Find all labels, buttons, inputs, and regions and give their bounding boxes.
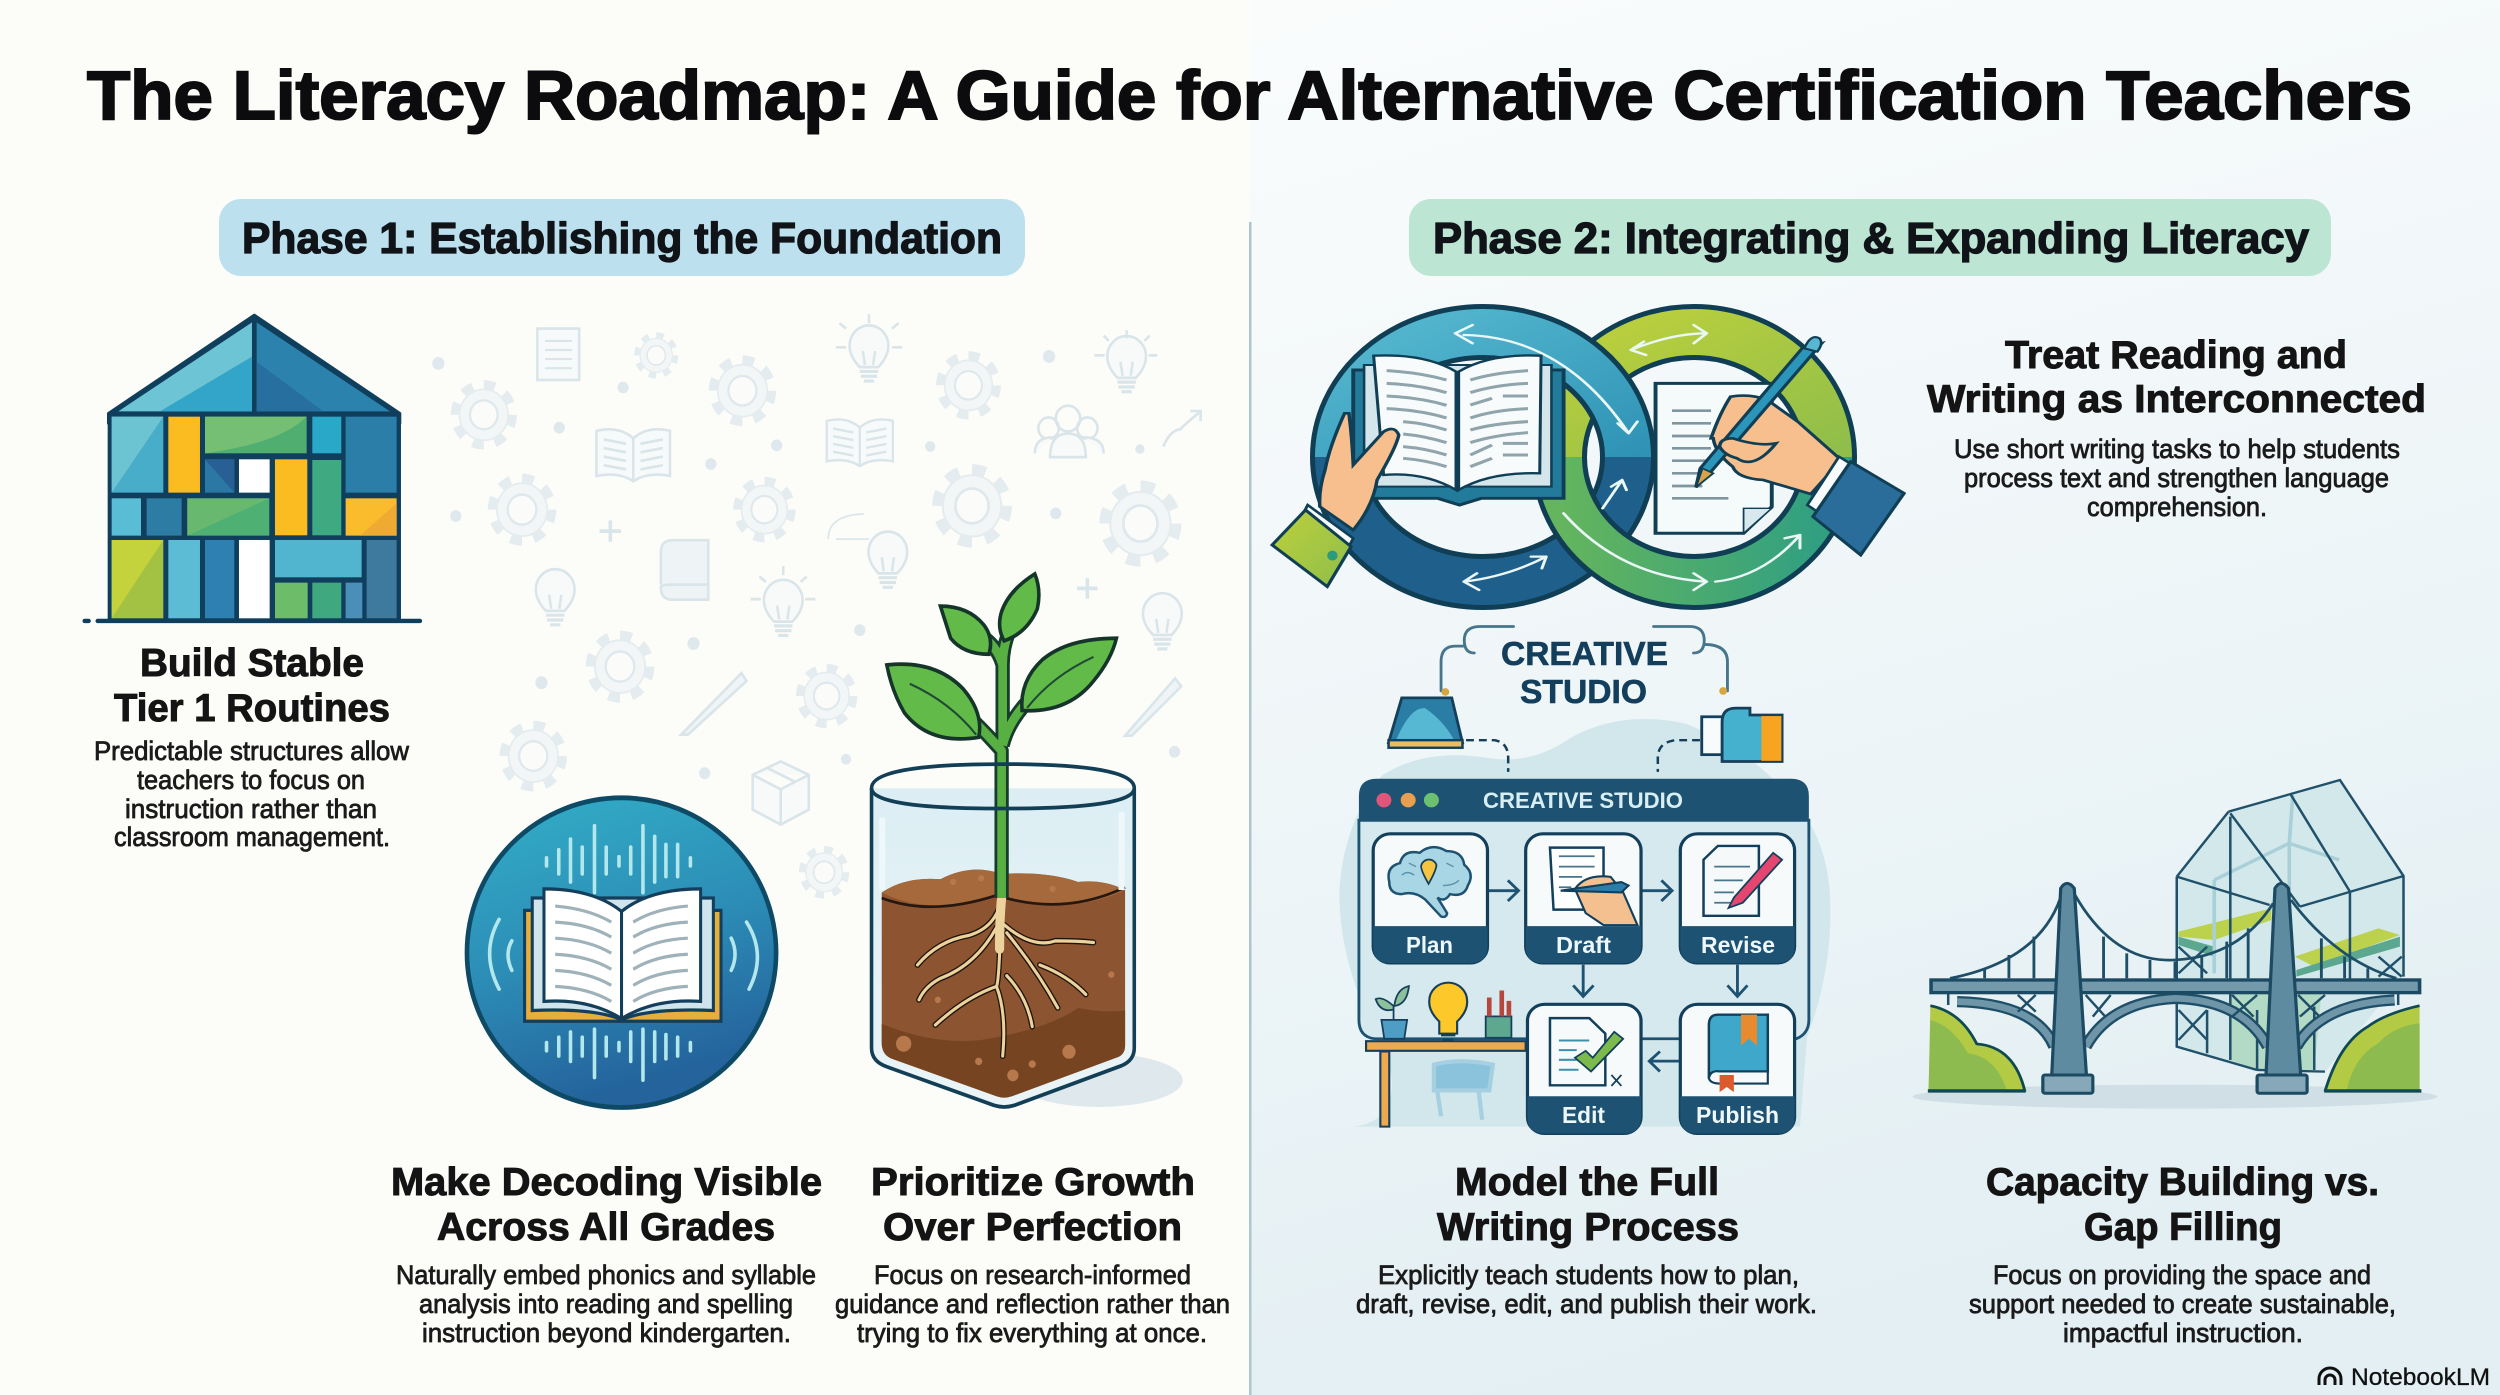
process arrows [1487, 880, 1747, 1071]
text block: prioritize growth: Focus on research-informed [874, 1260, 1191, 1290]
text block: capacity building vs gap filling: support needed to create sustainable, [1969, 1289, 2396, 1319]
roots [917, 898, 1093, 1056]
icons: gears [455, 335, 1176, 895]
text block: build stable tier 1 routines: Predictable structures allow [94, 736, 409, 766]
left hand holding book [1272, 413, 1399, 587]
tile labels: Publish [1696, 1102, 1779, 1128]
tile labels: Plan [1406, 932, 1453, 958]
text block: prioritize growth: Over Perfection [883, 1206, 1182, 1249]
glass outline and rim [872, 764, 1134, 1107]
glass shadow [1014, 1053, 1183, 1107]
open book [525, 889, 721, 1021]
text block: capacity building vs gap filling [1969, 1161, 2396, 1348]
text block: build stable tier 1 routines: instruction rather than [125, 794, 377, 824]
text block: make decoding visible: Naturally embed phonics and syllable [396, 1260, 816, 1290]
divider between phases [1249, 222, 1252, 1395]
house body and coloured tiles [108, 413, 401, 621]
text block: make decoding visible [391, 1161, 822, 1348]
text block: treat reading and writing: process text and strengthen language [1964, 463, 2389, 493]
text block: treat reading and writing: Use short writing tasks to help students [1954, 434, 2400, 464]
text block: make decoding visible: instruction beyond kindergarten. [422, 1318, 791, 1348]
phase 1 heading pill: Phase 1: Establishing the Foundation [242, 214, 1002, 263]
lamp and hanging cords [1441, 627, 1727, 691]
house roof [108, 315, 400, 423]
text block: capacity building vs gap filling: impactful instruction. [2063, 1318, 2303, 1348]
text block: treat reading and writing: Treat Reading and [2005, 334, 2347, 377]
bridge towers [2043, 883, 2307, 1093]
text block: make decoding visible: Make Decoding Visible [391, 1161, 822, 1204]
window frame [1359, 779, 1809, 1039]
icon: creative studio window [1339, 627, 1830, 1133]
title: The Literacy Roadmap: A Guide for Alternative Certification Teachers [87, 57, 2412, 134]
right folder tool [1702, 687, 1782, 762]
icon: revise page and pencil [1704, 846, 1782, 916]
text block: treat reading and writing: Writing as Interconnected [1927, 378, 2426, 421]
icon: bridge and greenhouse [1912, 780, 2437, 1109]
river banks [1928, 1006, 2421, 1092]
bridge deck [1931, 980, 2420, 993]
text block: build stable tier 1 routines [94, 642, 409, 852]
window title text: CREATIVE STUDIO [1483, 788, 1683, 813]
tile labels: Draft [1556, 932, 1611, 958]
panel: background idea icons [432, 314, 1201, 895]
bridge arches [1948, 993, 2398, 1047]
icon: plan brain with bulb [1389, 847, 1471, 917]
notebooklm watermark: NotebookLM [2351, 1364, 2490, 1391]
text block: prioritize growth: Prioritize Growth [871, 1161, 1195, 1204]
icon: open book with sound waves [467, 798, 776, 1107]
icon: seedling in glass with roots [872, 574, 1183, 1107]
step tiles [1373, 834, 1795, 1133]
left lamp [1389, 688, 1462, 748]
icon: publish book [1709, 1015, 1768, 1092]
right hand with pen [1696, 337, 1904, 555]
tile labels: Revise [1701, 932, 1775, 958]
phase 2 heading pill [1409, 199, 2331, 276]
text block: make decoding visible: analysis into reading and spelling [419, 1289, 793, 1319]
desk with plant, bulb and pencils [1366, 983, 1526, 1127]
text block: treat reading and writing: comprehension. [2087, 492, 2267, 522]
text block: capacity building vs gap filling: Gap Filling [2084, 1206, 2282, 1249]
icon: reading and writing infinity loop [1272, 325, 1904, 590]
phase 2 heading pill: Phase 2: Integrating & Expanding Literacy [1433, 214, 2310, 263]
heading: creative studio: STUDIO [1520, 673, 1647, 710]
icon: draft page and hand [1550, 848, 1637, 925]
phase 1 heading pill [219, 199, 1025, 276]
writing page [1656, 383, 1772, 533]
loop arrows [1455, 325, 1800, 590]
sound waves [490, 826, 757, 1080]
text block: model the full writing process [1356, 1161, 1817, 1319]
open book [1353, 355, 1564, 505]
icons: box, people, pencils and growth arrow [600, 406, 1201, 825]
text block: model the full writing process: Model the Full [1455, 1161, 1719, 1204]
infinity rings [1338, 332, 1829, 582]
glass body [872, 788, 1134, 1107]
text block: prioritize growth: guidance and reflection rather than [835, 1289, 1230, 1319]
background blob [1339, 719, 1830, 1127]
tile labels: Edit [1562, 1102, 1605, 1128]
text block: model the full writing process: Explicitly teach students how to plan, [1378, 1260, 1799, 1290]
icons: books and documents [537, 329, 893, 600]
icon: modular house [85, 315, 420, 621]
text block: make decoding visible: Across All Grades [437, 1206, 775, 1249]
icon: edit checklist [1550, 1018, 1623, 1086]
text block: build stable tier 1 routines: Build Stable [140, 642, 364, 685]
bridge cables and hangers [1950, 892, 2396, 978]
greenhouse [2177, 780, 2404, 1072]
text block: build stable tier 1 routines: teachers to focus on [137, 765, 365, 795]
ground shadow [1912, 1085, 2437, 1109]
heading: creative studio [1501, 635, 1668, 710]
text block: treat reading and writing [1927, 334, 2426, 522]
heading: creative studio: CREATIVE [1501, 635, 1668, 672]
soil [882, 870, 1125, 1098]
text block: capacity building vs gap filling: Focus on providing the space and [1993, 1260, 2371, 1290]
stem and leaves [887, 574, 1116, 898]
dashed connectors [1466, 740, 1700, 772]
tile labels [1406, 932, 1779, 1128]
text block: prioritize growth [835, 1161, 1230, 1348]
text block: build stable tier 1 routines: Tier 1 Routines [114, 687, 390, 730]
text block: capacity building vs gap filling: Capacity Building vs. [1986, 1161, 2379, 1204]
house ground line [85, 614, 420, 627]
icons: light bulbs [536, 314, 1182, 649]
icons: scattered dots [432, 350, 1180, 779]
text block: model the full writing process: draft, revise, edit, and publish their work. [1356, 1289, 1817, 1319]
text block: build stable tier 1 routines: classroom management. [114, 822, 390, 852]
text block: prioritize growth: trying to fix everything at once. [857, 1318, 1207, 1348]
circle badge [467, 798, 776, 1107]
text block: model the full writing process: Writing Process [1437, 1206, 1739, 1249]
